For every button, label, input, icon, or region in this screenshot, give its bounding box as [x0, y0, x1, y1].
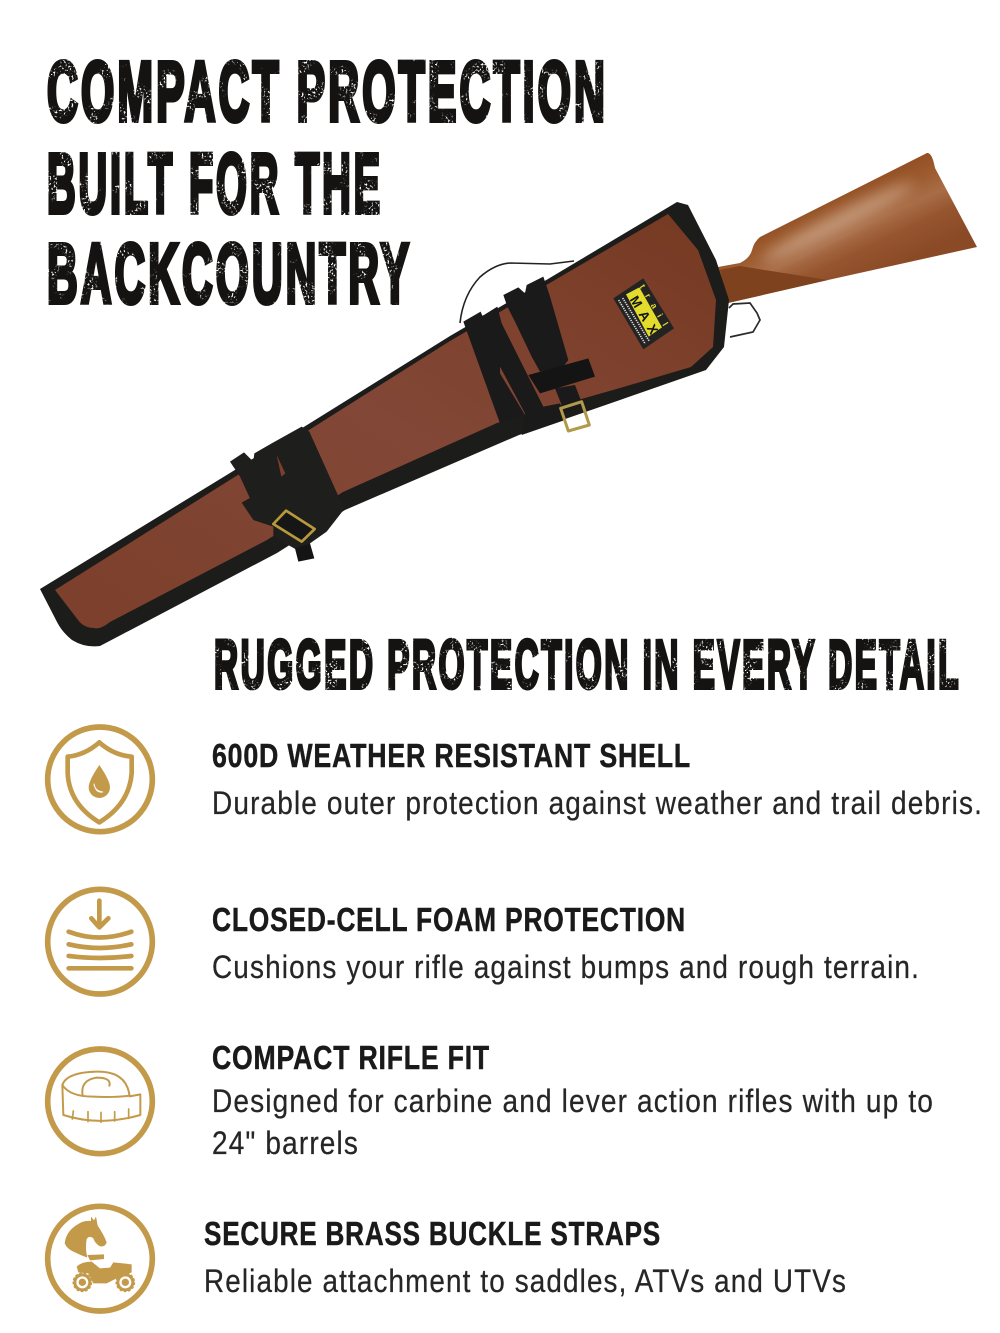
pull cord	[460, 261, 574, 323]
upper cross strap	[528, 358, 595, 393]
scabbard body	[40, 202, 729, 646]
feature 2 text	[212, 901, 920, 985]
lower strap wrap	[230, 427, 344, 562]
title: BUILT FOR THE	[47, 136, 383, 230]
icon: compressed foam layers	[48, 889, 152, 994]
trailMAX logo patch: trail	[638, 283, 670, 328]
icon: horse and ATV	[48, 1206, 152, 1311]
feature 4 text	[204, 1215, 847, 1299]
canvas panel	[55, 214, 716, 628]
lower brass buckle	[273, 511, 315, 542]
title: BACKCOUNTRY	[47, 226, 412, 320]
feature 3 text: COMPACT RIFLE FIT	[212, 1039, 490, 1076]
feature 3 text	[212, 1039, 934, 1161]
strap gap	[277, 455, 285, 477]
feature 3 text: 24" barrels	[212, 1125, 359, 1161]
lower buckle tab	[295, 543, 314, 562]
rifle stock	[718, 153, 977, 303]
feature 4 text: Reliable attachment to saddles, ATVs and UTVs	[204, 1263, 847, 1299]
icon: tape measure	[48, 1049, 152, 1154]
feature 1 text: 600D WEATHER RESISTANT SHELL	[212, 737, 691, 774]
feature 1 text	[212, 737, 983, 821]
trailMAX logo patch	[613, 278, 674, 349]
ATV wheels	[73, 1273, 134, 1291]
icon: shield with water drop	[48, 727, 152, 832]
trailMAX logo patch: MAX	[627, 293, 661, 337]
feature 2 text: CLOSED-CELL FOAM PROTECTION	[212, 901, 686, 938]
wire loop	[729, 303, 760, 337]
ATV	[77, 1254, 132, 1283]
title	[47, 44, 608, 320]
upper brass buckle	[561, 402, 589, 431]
feature 2 text: Cushions your rifle against bumps and rough terrain.	[212, 949, 920, 985]
horse head	[65, 1217, 107, 1258]
upper straps	[463, 277, 595, 435]
feature 4 text: SECURE BRASS BUCKLE STRAPS	[204, 1215, 661, 1252]
product: rifle in scabbard	[40, 153, 977, 646]
